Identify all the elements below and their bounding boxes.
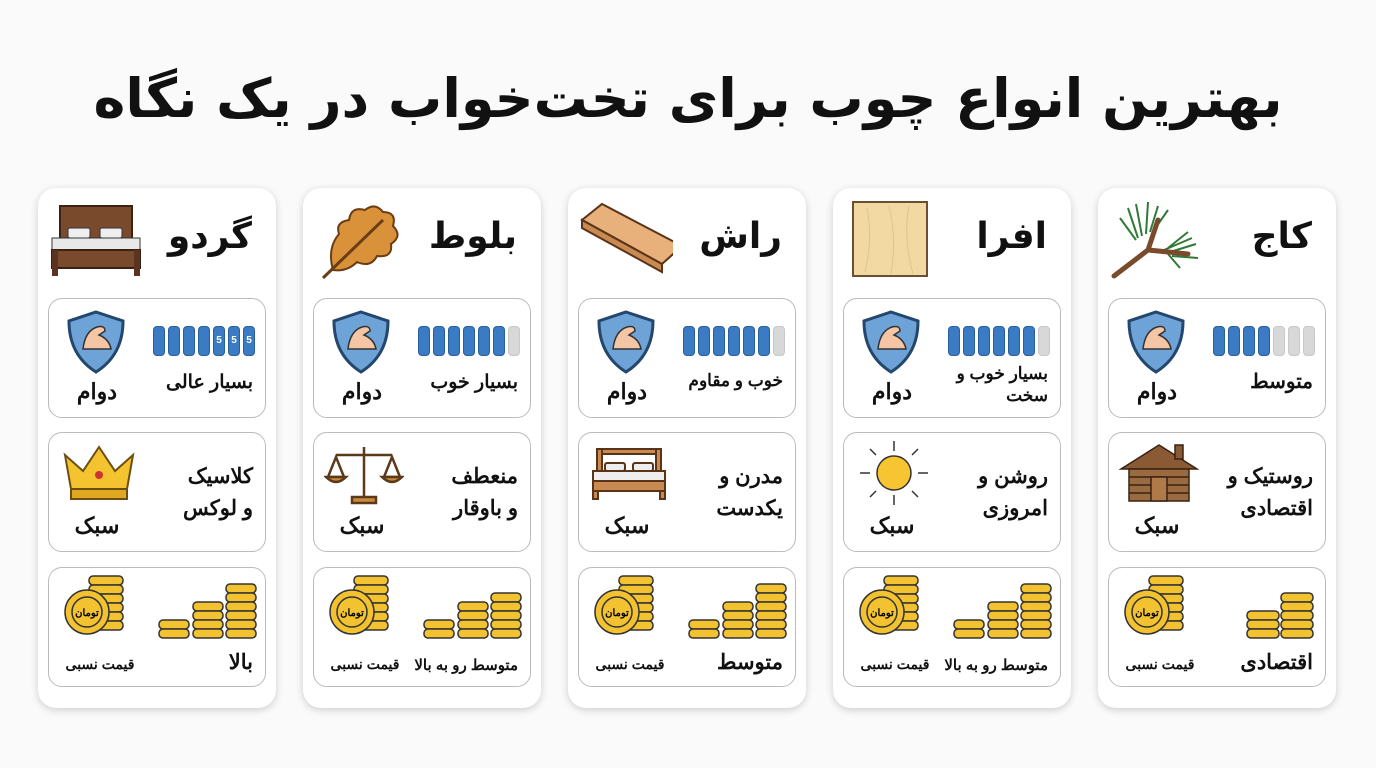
label	[1226, 465, 1313, 520]
icon: shield	[332, 310, 390, 374]
box: style	[843, 432, 1061, 552]
icon: coins	[594, 575, 787, 639]
label: بسیار خوب و	[957, 364, 1048, 383]
text: price caption: قیمت نسبی	[66, 656, 134, 672]
icon: coins	[859, 575, 1052, 639]
bars rating	[683, 326, 785, 356]
label	[183, 465, 254, 520]
box: style	[313, 432, 531, 552]
icon: coins: تومان	[605, 608, 629, 619]
box: price	[313, 567, 531, 687]
box: price	[578, 567, 796, 687]
label: اقتصادی	[1240, 651, 1313, 674]
text: style caption: سبک	[870, 513, 914, 538]
box: durability	[843, 298, 1061, 418]
icon: oak leaf	[322, 205, 399, 280]
label	[956, 364, 1048, 405]
label: متوسط	[717, 651, 783, 674]
label: و باوقار	[453, 497, 518, 520]
label: مدرن و	[719, 465, 783, 488]
heading: walnut: گردو	[168, 216, 252, 257]
label	[716, 465, 783, 520]
label: بالا	[229, 651, 253, 674]
bars rating	[1213, 326, 1315, 356]
label: روشن و	[978, 465, 1048, 488]
label: اقتصادی	[1240, 497, 1313, 520]
box: durability	[578, 298, 796, 418]
bars rating	[153, 326, 255, 356]
icon: maple wood block	[852, 201, 928, 277]
bars rating	[418, 326, 520, 356]
icon: coins	[1124, 575, 1314, 639]
box: durability	[48, 298, 266, 418]
panel: oak	[303, 188, 541, 708]
text: price caption: قیمت نسبی	[1126, 656, 1194, 672]
icon: crown	[64, 445, 134, 500]
text: style caption: سبک	[1135, 513, 1179, 538]
box: price	[1108, 567, 1326, 687]
bars rating	[948, 326, 1050, 356]
icon: coins: تومان	[1135, 608, 1159, 619]
bars rating: 5	[246, 335, 252, 346]
text: durability caption: دوام	[607, 379, 647, 404]
label: بسیار خوب	[430, 372, 518, 393]
text: durability caption: دوام	[342, 379, 382, 404]
label: متوسط رو به بالا	[414, 657, 518, 674]
icon: coins: تومان	[340, 608, 364, 619]
label: روستیک و	[1228, 465, 1313, 488]
icon: wood plank	[580, 202, 673, 274]
panel: beech	[568, 188, 806, 708]
label: منعطف	[451, 465, 518, 488]
icon: modern bed	[592, 448, 666, 500]
icon: bed wood	[51, 205, 141, 276]
box: style	[578, 432, 796, 552]
text: style caption: سبک	[75, 513, 119, 538]
icon: shield	[68, 310, 124, 374]
label: کلاسیک	[188, 465, 253, 488]
icon: pine branch	[1112, 202, 1198, 278]
label: بسیار عالی	[166, 372, 253, 393]
icon: coins: تومان	[870, 608, 894, 619]
box: durability	[1108, 298, 1326, 418]
label: خوب و مقاوم	[688, 371, 783, 390]
panel: walnut	[38, 188, 276, 708]
icon: coins	[64, 575, 257, 639]
panel: pine	[1098, 188, 1336, 708]
box: style	[48, 432, 266, 552]
text: durability caption: دوام	[1137, 379, 1177, 404]
icon: scales	[324, 447, 404, 504]
label: امروزی	[983, 497, 1048, 520]
icon: coins	[329, 575, 522, 639]
title: بهترین انواع چوب برای تخت‌خواب در یک نگاه	[93, 67, 1283, 130]
label: متوسط رو به بالا	[944, 657, 1048, 674]
text: price caption: قیمت نسبی	[861, 656, 929, 672]
text: style caption: سبک	[605, 513, 649, 538]
text: durability caption: دوام	[872, 379, 912, 404]
heading: beech: راش	[699, 216, 782, 257]
box: price	[843, 567, 1061, 687]
bars rating: 5	[231, 335, 237, 346]
text: price caption: قیمت نسبی	[331, 656, 399, 672]
icon: sun	[860, 441, 928, 505]
heading: pine: کاج	[1252, 216, 1312, 257]
icon: log cabin	[1119, 444, 1199, 502]
icon: shield	[862, 310, 920, 374]
text: durability caption: دوام	[77, 379, 117, 404]
label	[451, 465, 518, 520]
box: durability	[313, 298, 531, 418]
label: یکدست	[716, 497, 783, 520]
icon: shield	[598, 310, 654, 374]
label: متوسط	[1250, 371, 1313, 393]
label	[976, 465, 1048, 520]
bars rating: 5	[216, 335, 222, 346]
box: price	[48, 567, 266, 687]
label: و لوکس	[183, 497, 253, 520]
icon: shield	[1128, 310, 1184, 374]
text: price caption: قیمت نسبی	[596, 656, 664, 672]
panel: maple	[833, 188, 1071, 708]
heading: oak: بلوط	[429, 216, 517, 257]
box: style	[1108, 432, 1326, 552]
heading: maple: افرا	[976, 216, 1047, 257]
icon: coins: تومان	[75, 608, 99, 619]
text: style caption: سبک	[340, 513, 384, 538]
label: سخت	[1006, 386, 1048, 405]
